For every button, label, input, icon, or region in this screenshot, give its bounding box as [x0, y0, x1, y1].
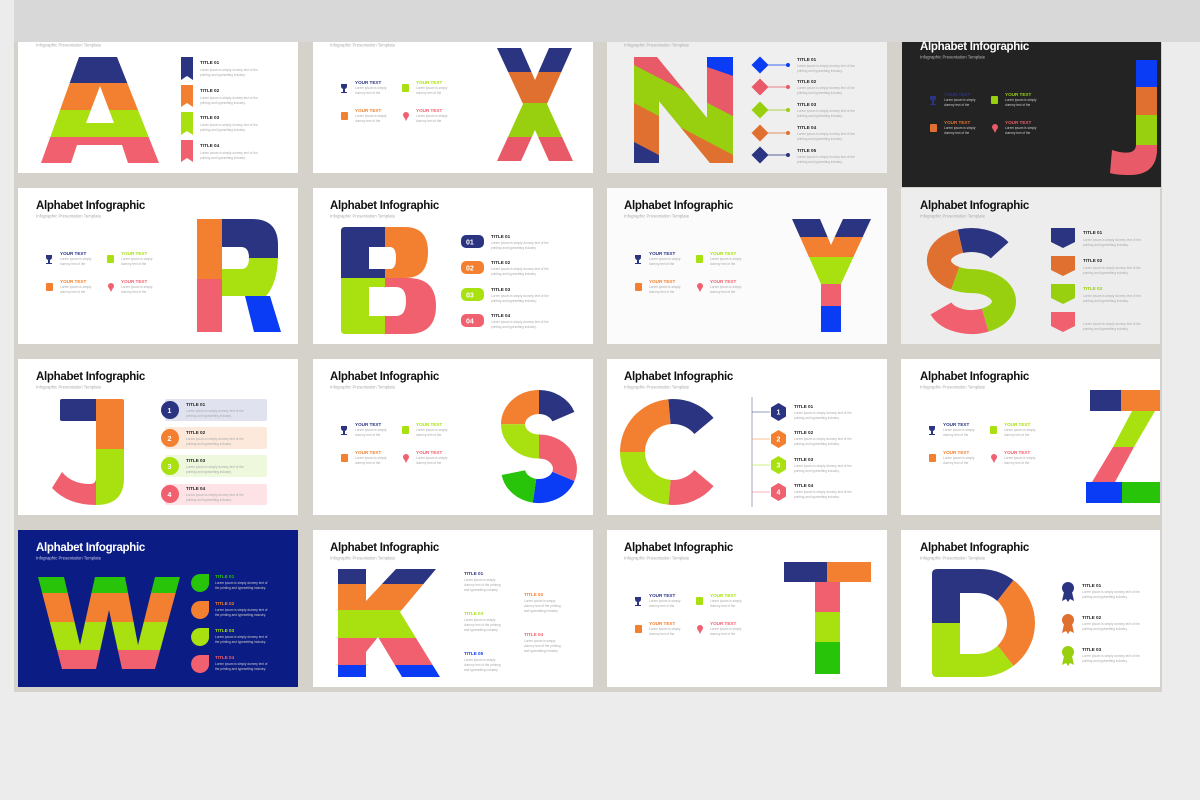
subtitle D: Infographic Presentation Template — [920, 556, 986, 560]
legend S1: Lorem ipsum is simply dummy text of the — [1083, 294, 1141, 298]
slide: letter X — [313, 42, 593, 173]
legend K: and typesetting industry. — [464, 588, 498, 592]
legend W: the printing and typesetting industry. — [215, 586, 266, 590]
legend S1: printing and typesetting industry. — [1083, 299, 1129, 303]
legend N: TITLE 04 — [797, 125, 817, 130]
legend dark: YOUR TEXT — [944, 120, 970, 125]
subtitle Y: Infographic Presentation Template — [624, 214, 690, 218]
legend C timeline: TITLE 03 — [794, 457, 814, 462]
slide: letter Z — [901, 359, 1160, 515]
legend K: dummy text of the printing — [464, 623, 501, 627]
legend T: Lorem ipsum is simply — [710, 599, 742, 603]
legend C timeline: printing and typesetting industry. — [794, 469, 840, 473]
title Z: Alphabet Infographic — [920, 371, 1030, 383]
subtitles row 1: Infographic Presentation Template — [36, 42, 102, 48]
legend K: TITLE 02 — [524, 592, 544, 597]
legend B: 04 — [466, 318, 474, 326]
legend dark: YOUR TEXT — [1005, 92, 1031, 97]
slide: letter T — [607, 530, 887, 687]
title S2: Alphabet Infographic — [330, 371, 440, 383]
legend R: YOUR TEXT — [121, 279, 147, 284]
letter J dark — [1110, 60, 1157, 175]
legend A — [181, 57, 258, 162]
legend K: TITLE 01 — [464, 571, 484, 576]
legend N: printing and typesetting industry. — [797, 114, 843, 118]
legend X: dummy text of the — [416, 91, 442, 95]
legend X: dummy text of the — [355, 91, 381, 95]
legend J: printing and typesetting industry. — [186, 498, 232, 502]
legend A: Lorem ipsum is simply dummy text of the — [200, 123, 258, 127]
legend N: Lorem ipsum is simply dummy text of the — [797, 132, 855, 136]
subtitle W: Infographic Presentation Template — [36, 556, 102, 560]
legend W: TITLE 04 — [215, 655, 235, 660]
legend K: TITLE 04 — [524, 632, 544, 637]
legend W: Lorem ipsum is simply dummy text of — [215, 635, 268, 639]
frame backdrop — [14, 42, 1162, 692]
title K: Alphabet Infographic — [330, 542, 440, 554]
legend Y: dummy text of the — [649, 262, 675, 266]
legend N: printing and typesetting industry. — [797, 160, 843, 164]
legend K: and typesetting industry. — [524, 609, 558, 613]
legend Y: dummy text of the — [649, 290, 675, 294]
legend W: TITLE 02 — [215, 601, 235, 606]
legend S2: dummy text of the — [416, 461, 442, 465]
legend N: Lorem ipsum is simply dummy text of the — [797, 109, 855, 113]
letter D — [932, 569, 1035, 677]
legend N: TITLE 02 — [797, 79, 817, 84]
legend A: TITLE 03 — [200, 115, 220, 120]
legend D: printing and typesetting industry. — [1082, 595, 1128, 599]
legend K — [464, 571, 561, 672]
subtitle K: Infographic Presentation Template — [330, 556, 396, 560]
legend B: printing and typesetting industry. — [491, 325, 537, 329]
legend Z: Lorem ipsum is simply — [943, 428, 975, 432]
legend B: 03 — [466, 292, 474, 300]
legend R: dummy text of the — [121, 290, 147, 294]
legend J: printing and typesetting industry. — [186, 470, 232, 474]
legend S1: printing and typesetting industry. — [1083, 271, 1129, 275]
legend N: TITLE 01 — [797, 57, 817, 62]
slide: letter S with shields — [901, 188, 1160, 344]
legend C timeline: printing and typesetting industry. — [794, 495, 840, 499]
legend W: Lorem ipsum is simply dummy text of — [215, 662, 268, 666]
slide: letter D — [901, 530, 1160, 700]
legend B: TITLE 04 — [491, 313, 511, 318]
letter Z — [1086, 390, 1160, 503]
legend R: YOUR TEXT — [60, 279, 86, 284]
legend T: dummy text of the — [710, 604, 736, 608]
legend S2: YOUR TEXT — [416, 422, 442, 427]
legend K: TITLE 05 — [464, 651, 484, 656]
legend Z: YOUR TEXT — [1004, 450, 1030, 455]
legend R: Lorem ipsum is simply — [60, 257, 92, 261]
legend K: Lorem ipsum is simply — [464, 658, 496, 662]
legend D: Lorem ipsum is simply dummy text of the — [1082, 590, 1140, 594]
legend dark: YOUR TEXT — [944, 92, 970, 97]
legend J: 4 — [168, 492, 172, 499]
title C: Alphabet Infographic — [624, 371, 734, 383]
legend X: dummy text of the — [416, 119, 442, 123]
legend X — [341, 80, 448, 123]
legend K: and typesetting industry. — [524, 649, 558, 653]
legend S2: dummy text of the — [355, 461, 381, 465]
legend Z: dummy text of the — [943, 461, 969, 465]
legend N: printing and typesetting industry. — [797, 91, 843, 95]
title S1: Alphabet Infographic — [920, 200, 1030, 212]
legend S1: printing and typesetting industry. — [1083, 243, 1129, 247]
legend Y: Lorem ipsum is simply — [649, 285, 681, 289]
legend T: YOUR TEXT — [649, 621, 675, 626]
legend B: printing and typesetting industry. — [491, 299, 537, 303]
subtitle B: Infographic Presentation Template — [330, 214, 396, 218]
legend T: YOUR TEXT — [710, 621, 736, 626]
legend R: dummy text of the — [60, 262, 86, 266]
legend C timeline: 3 — [776, 462, 780, 470]
legend Z: dummy text of the — [943, 433, 969, 437]
legend X: YOUR TEXT — [355, 80, 381, 85]
legend dark — [930, 92, 1037, 135]
title B: Alphabet Infographic — [330, 200, 440, 212]
legend R: YOUR TEXT — [121, 251, 147, 256]
legend Y: YOUR TEXT — [649, 251, 675, 256]
legend dark: YOUR TEXT — [1005, 120, 1031, 125]
legend A: Lorem ipsum is simply dummy text of the — [200, 68, 258, 72]
letter R — [197, 219, 281, 332]
legend dark: dummy text of the — [1005, 131, 1031, 135]
subtitle R: Infographic Presentation Template — [36, 214, 102, 218]
legend dark: Lorem ipsum is simply — [1005, 98, 1037, 102]
legend J: printing and typesetting industry. — [186, 414, 232, 418]
legend S1 — [1051, 228, 1141, 332]
legend W: the printing and typesetting industry. — [215, 613, 266, 617]
legend R: dummy text of the — [121, 262, 147, 266]
slide: dark letter J — [902, 41, 1161, 187]
title R: Alphabet Infographic — [36, 200, 146, 212]
legend C timeline: printing and typesetting industry. — [794, 416, 840, 420]
legend B: Lorem ipsum is simply dummy text of the — [491, 320, 549, 324]
legend S1: printing and typesetting industry. — [1083, 327, 1129, 331]
legend K: and typesetting industry. — [464, 628, 498, 632]
legend T: Lorem ipsum is simply — [649, 627, 681, 631]
legend A: TITLE 02 — [200, 88, 220, 93]
legend Y: Lorem ipsum is simply — [710, 257, 742, 261]
legend C timeline: Lorem ipsum is simply dummy text of the — [794, 411, 852, 415]
legend D: Lorem ipsum is simply dummy text of the — [1082, 622, 1140, 626]
subtitle Z: Infographic Presentation Template — [920, 384, 986, 390]
legend Y — [635, 251, 742, 294]
letter S2 — [513, 402, 565, 491]
legend K: dummy text of the printing — [524, 644, 561, 648]
legend Y: YOUR TEXT — [710, 251, 736, 256]
letter S1 — [939, 240, 1004, 322]
legend B: Lorem ipsum is simply dummy text of the — [491, 294, 549, 298]
legend X: dummy text of the — [355, 119, 381, 123]
subtitle dark: Infographic Presentation Template — [920, 54, 986, 60]
legend J: 2 — [168, 436, 172, 443]
legend S1: Lorem ipsum is simply dummy text of the — [1083, 322, 1141, 326]
legend N — [752, 57, 855, 164]
legend B: 01 — [466, 240, 474, 246]
legend K: dummy text of the printing — [464, 583, 501, 587]
legend J: Lorem ipsum is simply dummy text of the — [186, 465, 244, 469]
legend C timeline: 2 — [776, 436, 780, 444]
subtitles row 1: Infographic Presentation Template — [624, 42, 690, 48]
title J: Alphabet Infographic — [36, 371, 146, 383]
legend S2: YOUR TEXT — [416, 450, 442, 455]
letter W — [38, 577, 180, 669]
legend S1: TITLE 02 — [1083, 258, 1103, 263]
legend A: Lorem ipsum is simply dummy text of the — [200, 96, 258, 100]
legend S2: dummy text of the — [416, 433, 442, 437]
legend B: 02 — [466, 266, 474, 272]
legend C timeline: Lorem ipsum is simply dummy text of the — [794, 490, 852, 494]
legend J: TITLE 04 — [186, 486, 206, 491]
legend J: Lorem ipsum is simply dummy text of the — [186, 409, 244, 413]
legend C timeline: Lorem ipsum is simply dummy text of the — [794, 464, 852, 468]
legend T: YOUR TEXT — [710, 593, 736, 598]
legend J — [161, 399, 267, 505]
legend K: dummy text of the printing — [464, 663, 501, 667]
letter N — [634, 57, 733, 163]
legend S2: dummy text of the — [355, 433, 381, 437]
legend D: printing and typesetting industry. — [1082, 627, 1128, 631]
legend K: and typesetting industry. — [464, 668, 498, 672]
subtitles row 1 — [36, 42, 690, 48]
legend dark: Lorem ipsum is simply — [1005, 126, 1037, 130]
legend C timeline: TITLE 02 — [794, 430, 814, 435]
legend W: TITLE 03 — [215, 628, 235, 633]
legend S2: Lorem ipsum is simply — [416, 428, 448, 432]
legend C timeline — [752, 397, 852, 507]
legend C timeline: TITLE 04 — [794, 483, 814, 488]
legend B: Lorem ipsum is simply dummy text of the — [491, 267, 549, 271]
legend B: Lorem ipsum is simply dummy text of the — [491, 241, 549, 245]
legend A: Lorem ipsum is simply dummy text of the — [200, 151, 258, 155]
legend A: printing and typesetting industry. — [200, 73, 246, 77]
legend N: printing and typesetting industry. — [797, 137, 843, 141]
legend N: TITLE 05 — [797, 148, 817, 153]
letter T — [784, 562, 871, 674]
legend J: Lorem ipsum is simply dummy text of the — [186, 493, 244, 497]
legend Y: dummy text of the — [710, 290, 736, 294]
legend J: TITLE 03 — [186, 458, 206, 463]
slide: letter K — [313, 530, 593, 687]
legend X: Lorem ipsum is simply — [416, 86, 448, 90]
legend B: printing and typesetting industry. — [491, 246, 537, 250]
title Y: Alphabet Infographic — [624, 200, 734, 212]
legend R — [46, 251, 153, 294]
legend Z: YOUR TEXT — [1004, 422, 1030, 427]
legend R: Lorem ipsum is simply — [121, 285, 153, 289]
legend J: 1 — [168, 408, 172, 415]
slide: letter S six segments — [313, 359, 593, 515]
title dark: Alphabet Infographic — [920, 41, 1030, 53]
subtitle S2: Infographic Presentation Template — [330, 384, 396, 390]
legend C timeline: 4 — [776, 490, 780, 496]
legend Z: YOUR TEXT — [943, 450, 969, 455]
legend N: Lorem ipsum is simply dummy text of the — [797, 155, 855, 159]
subtitle T: Infographic Presentation Template — [624, 556, 690, 560]
subtitle J: Infographic Presentation Template — [36, 384, 102, 390]
legend D: TITLE 02 — [1082, 615, 1102, 620]
legend N: printing and typesetting industry. — [797, 69, 843, 73]
legend D: Lorem ipsum is simply dummy text of the — [1082, 654, 1140, 658]
legend K: Lorem ipsum is simply — [524, 599, 556, 603]
legend C timeline: Lorem ipsum is simply dummy text of the — [794, 437, 852, 441]
legend B: TITLE 03 — [491, 287, 511, 292]
legend Y: Lorem ipsum is simply — [649, 257, 681, 261]
title W: Alphabet Infographic — [36, 542, 146, 554]
legend dark: Lorem ipsum is simply — [944, 98, 976, 102]
letter B — [341, 227, 436, 334]
legend X: YOUR TEXT — [416, 108, 442, 113]
legend S2 — [341, 422, 448, 465]
legend N: Lorem ipsum is simply dummy text of the — [797, 64, 855, 68]
legend C timeline: 1 — [776, 410, 780, 416]
legend Y: Lorem ipsum is simply — [710, 285, 742, 289]
letter X — [497, 48, 573, 161]
legend T — [635, 593, 742, 636]
legend J: 3 — [168, 464, 172, 471]
legend R: YOUR TEXT — [60, 251, 86, 256]
legend S1: TITLE 03 — [1083, 286, 1103, 291]
legend X: YOUR TEXT — [416, 80, 442, 85]
legend T: dummy text of the — [649, 632, 675, 636]
legend A: printing and typesetting industry. — [200, 156, 246, 160]
legend Z: Lorem ipsum is simply — [943, 456, 975, 460]
legend C timeline: printing and typesetting industry. — [794, 442, 840, 446]
slide: letter Y — [607, 188, 887, 344]
legend K: Lorem ipsum is simply — [464, 618, 496, 622]
letter J — [52, 399, 124, 505]
legend X: YOUR TEXT — [355, 108, 381, 113]
subtitle C: Infographic Presentation Template — [624, 384, 690, 390]
legend J: printing and typesetting industry. — [186, 442, 232, 446]
legend A: TITLE 01 — [200, 60, 220, 65]
legend X: Lorem ipsum is simply — [355, 86, 387, 90]
legend Z — [929, 422, 1036, 465]
legend N: TITLE 03 — [797, 102, 817, 107]
legend S1: Lorem ipsum is simply dummy text of the — [1083, 266, 1141, 270]
legend R: Lorem ipsum is simply — [121, 257, 153, 261]
legend D: TITLE 01 — [1082, 583, 1102, 588]
legend B: TITLE 02 — [491, 260, 511, 265]
slide: letter N — [607, 42, 887, 173]
legend R: Lorem ipsum is simply — [60, 285, 92, 289]
legend dark: dummy text of the — [944, 103, 970, 107]
legend Z: Lorem ipsum is simply — [1004, 456, 1036, 460]
legend X: Lorem ipsum is simply — [355, 114, 387, 118]
legend J: TITLE 02 — [186, 430, 206, 435]
letter Y — [792, 219, 871, 332]
legend A: printing and typesetting industry. — [200, 101, 246, 105]
legend dark: Lorem ipsum is simply — [944, 126, 976, 130]
legend Y: YOUR TEXT — [710, 279, 736, 284]
legend B: TITLE 01 — [491, 234, 511, 239]
slide: letter C — [607, 359, 887, 515]
legend S2: YOUR TEXT — [355, 422, 381, 427]
legend J: Lorem ipsum is simply dummy text of the — [186, 437, 244, 441]
legend Y: dummy text of the — [710, 262, 736, 266]
legend S2: Lorem ipsum is simply — [355, 456, 387, 460]
legend A: TITLE 04 — [200, 143, 220, 148]
legend Z: dummy text of the — [1004, 433, 1030, 437]
letter K — [338, 569, 440, 677]
legend R: dummy text of the — [60, 290, 86, 294]
legend D: TITLE 03 — [1082, 647, 1102, 652]
legend T: Lorem ipsum is simply — [710, 627, 742, 631]
legend Y: YOUR TEXT — [649, 279, 675, 284]
letter C donut — [620, 399, 714, 505]
legend B: printing and typesetting industry. — [491, 272, 537, 276]
slide: letter R — [18, 188, 298, 344]
legend Z: YOUR TEXT — [943, 422, 969, 427]
legend B — [461, 234, 549, 329]
legend K: Lorem ipsum is simply — [464, 578, 496, 582]
letter A — [41, 57, 159, 163]
legend dark: dummy text of the — [1005, 103, 1031, 107]
legend W: TITLE 01 — [215, 574, 235, 579]
title D: Alphabet Infographic — [920, 542, 1030, 554]
legend W: Lorem ipsum is simply dummy text of — [215, 608, 268, 612]
top backdrop band — [14, 0, 1200, 42]
legend Z: Lorem ipsum is simply — [1004, 428, 1036, 432]
legend S2: Lorem ipsum is simply — [416, 456, 448, 460]
legend W: the printing and typesetting industry. — [215, 667, 266, 671]
legend K: Lorem ipsum is simply — [524, 639, 556, 643]
legend K: dummy text of the printing — [524, 604, 561, 608]
legend T: Lorem ipsum is simply — [649, 599, 681, 603]
legend D — [1062, 582, 1140, 666]
legend T: YOUR TEXT — [649, 593, 675, 598]
legend T: dummy text of the — [710, 632, 736, 636]
legend D: printing and typesetting industry. — [1082, 659, 1128, 663]
legend S2: YOUR TEXT — [355, 450, 381, 455]
legend W — [191, 574, 268, 673]
slide: letter A — [18, 42, 298, 173]
legend X: Lorem ipsum is simply — [416, 114, 448, 118]
legend T: dummy text of the — [649, 604, 675, 608]
title T: Alphabet Infographic — [624, 542, 734, 554]
legend W: the printing and typesetting industry. — [215, 640, 266, 644]
subtitles row 1: Infographic Presentation Template — [330, 42, 396, 48]
legend W: Lorem ipsum is simply dummy text of — [215, 581, 268, 585]
legend N: Lorem ipsum is simply dummy text of the — [797, 86, 855, 90]
legend K: TITLE 03 — [464, 611, 484, 616]
slide: letter J — [18, 359, 298, 515]
legend C timeline: TITLE 01 — [794, 404, 814, 409]
legend J: TITLE 01 — [186, 402, 206, 407]
legend S2: Lorem ipsum is simply — [355, 428, 387, 432]
slide: letter B — [313, 188, 593, 344]
legend dark: dummy text of the — [944, 131, 970, 135]
legend S1: TITLE 01 — [1083, 230, 1103, 235]
legend A: printing and typesetting industry. — [200, 128, 246, 132]
legend Z: dummy text of the — [1004, 461, 1030, 465]
legend S1: Lorem ipsum is simply dummy text of the — [1083, 238, 1141, 242]
slide: letter W — [18, 530, 298, 687]
subtitle S1: Infographic Presentation Template — [920, 214, 986, 218]
